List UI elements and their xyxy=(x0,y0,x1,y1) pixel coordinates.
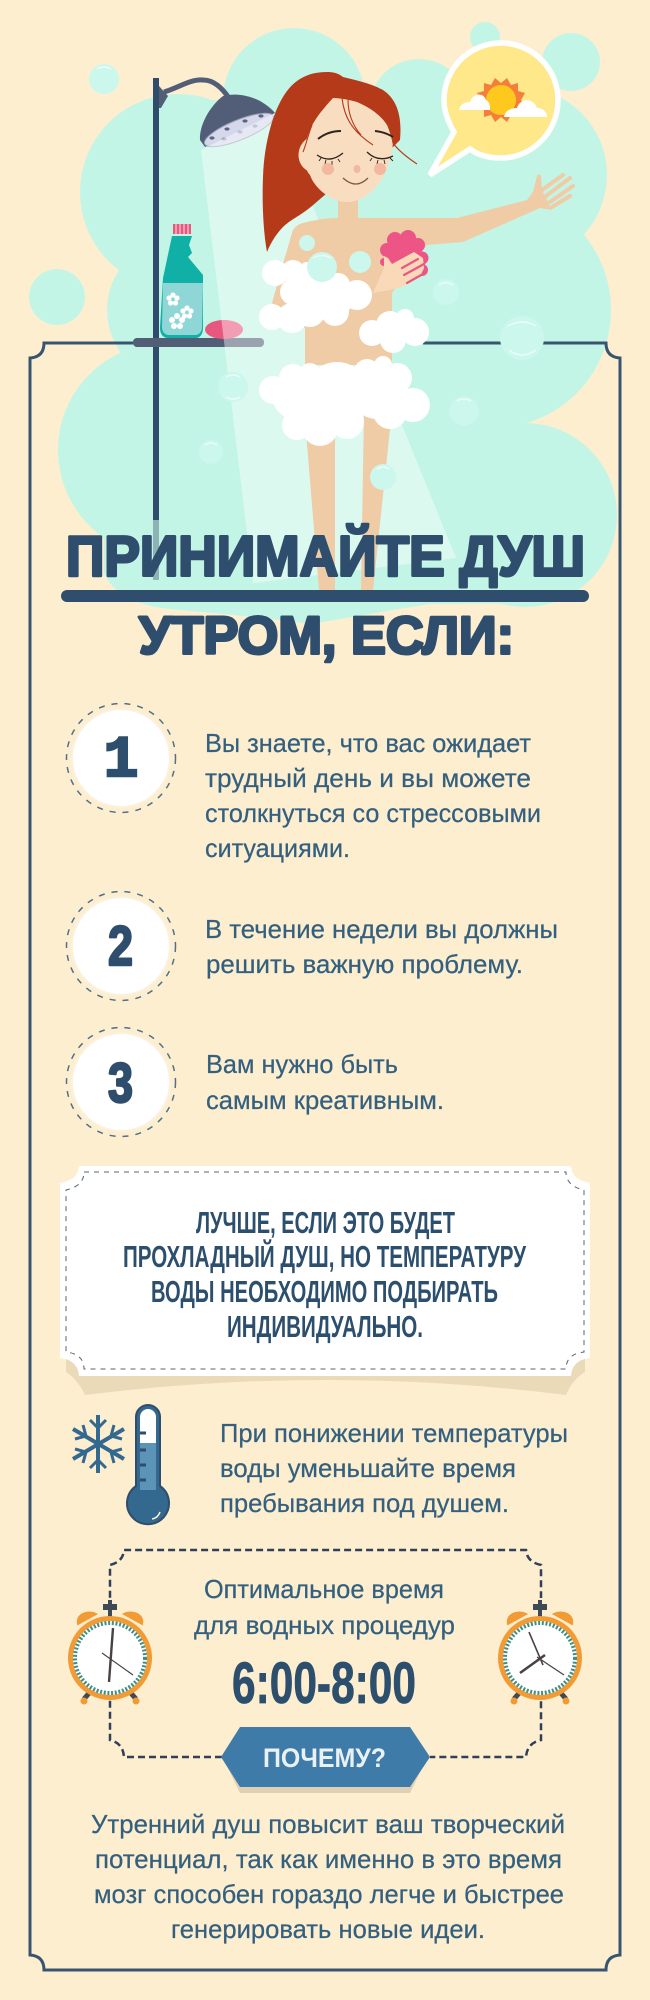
soap foam xyxy=(259,260,430,446)
text item 1 xyxy=(205,728,541,863)
clouds xyxy=(459,94,547,117)
closing paragraph xyxy=(91,1809,565,1944)
cheeks and nose xyxy=(322,163,386,175)
callout ticket: ИНДИВИДУАЛЬНО. xyxy=(227,1309,423,1344)
callout card xyxy=(60,1166,590,1376)
text: lower the temperature: пребывания под душем. xyxy=(220,1488,509,1518)
text item 3 xyxy=(206,1049,444,1115)
text item 1: столкнуться со стрессовыми xyxy=(205,798,541,828)
legs xyxy=(305,410,392,590)
bubble highlights xyxy=(97,67,536,469)
dashed time box xyxy=(110,1550,541,1757)
speech bubble with sun xyxy=(430,43,558,175)
flowers xyxy=(166,292,194,329)
callout ticket xyxy=(60,1166,590,1395)
text item 1: трудный день и вы можете xyxy=(205,763,531,793)
hair strands xyxy=(303,98,417,164)
hand fingers xyxy=(542,175,573,207)
text item 1: ситуациями. xyxy=(205,833,350,863)
face xyxy=(304,98,393,202)
text item 2 xyxy=(205,914,558,979)
optimal time label: для водных процедур xyxy=(194,1610,455,1640)
number badge 2 xyxy=(66,892,176,1000)
sun disc xyxy=(486,85,516,115)
mint bubble cloud background xyxy=(29,22,617,624)
hair back xyxy=(263,72,400,252)
smile xyxy=(343,178,368,184)
shower pole xyxy=(153,78,159,580)
shower light beam xyxy=(201,113,456,583)
callout text: ЛУЧШЕ, ЕСЛИ ЭТО БУДЕТ xyxy=(196,1205,455,1240)
woman xyxy=(263,72,573,590)
upper foam xyxy=(262,260,288,286)
decorative frame xyxy=(30,343,620,1970)
text item 2: решить важную проблему. xyxy=(206,949,523,979)
title line 2: УТРОМ, ЕСЛИ: xyxy=(139,606,514,666)
closing paragraph: потенциал, так как именно в это время xyxy=(95,1844,562,1874)
sun rays xyxy=(477,78,525,122)
text item 2: В течение недели вы должны xyxy=(205,914,558,944)
icon: thermometer xyxy=(127,1405,169,1524)
closing paragraph: генерировать новые идеи. xyxy=(171,1914,485,1944)
shower head xyxy=(159,80,277,153)
middle foam xyxy=(359,320,385,346)
icon: left alarm clock xyxy=(68,1598,152,1704)
callout shadow xyxy=(66,1357,585,1395)
number badge 3 xyxy=(66,1028,176,1136)
closing paragraph: мозг способен гораздо легче и быстрее xyxy=(94,1879,564,1909)
soap xyxy=(205,320,243,339)
why hexagon badge xyxy=(221,1727,430,1793)
icon: right alarm clock xyxy=(498,1598,582,1704)
number badge 2: 2 xyxy=(108,914,133,977)
number badge 3: 3 xyxy=(108,1051,133,1114)
shelf xyxy=(133,338,264,347)
water bubbles xyxy=(89,64,544,490)
text item 1: Вы знаете, что вас ожидает xyxy=(205,728,531,758)
text: lower the temperature xyxy=(220,1418,568,1518)
text: lower the temperature: При понижении температуры xyxy=(220,1418,568,1448)
torso and arm xyxy=(272,174,552,365)
hand on pouf xyxy=(373,252,424,293)
number badge 1: 1 xyxy=(104,729,138,794)
pouf xyxy=(380,230,428,278)
icon: snowflake xyxy=(73,1415,124,1473)
lower foam xyxy=(259,376,287,404)
ear xyxy=(298,138,310,172)
text item 3: Вам нужно быть xyxy=(206,1049,398,1079)
title line 1: ПРИНИМАЙТЕ ДУШ xyxy=(66,524,585,588)
optimal time label: Оптимальное время xyxy=(204,1574,444,1604)
why hexagon badge: ПОЧЕМУ? xyxy=(263,1743,386,1773)
time range: 6:00-8:00 xyxy=(232,1651,416,1716)
eyes and brows xyxy=(317,131,393,165)
number badge 1 xyxy=(66,704,176,812)
optimal time label xyxy=(194,1574,455,1640)
closing paragraph: Утренний душ повысит ваш творческий xyxy=(91,1809,565,1839)
bottle xyxy=(160,224,203,338)
text item 3: самым креативным. xyxy=(206,1085,444,1115)
title bar xyxy=(61,590,589,602)
text: lower the temperature: воды уменьшайте время xyxy=(220,1453,516,1483)
